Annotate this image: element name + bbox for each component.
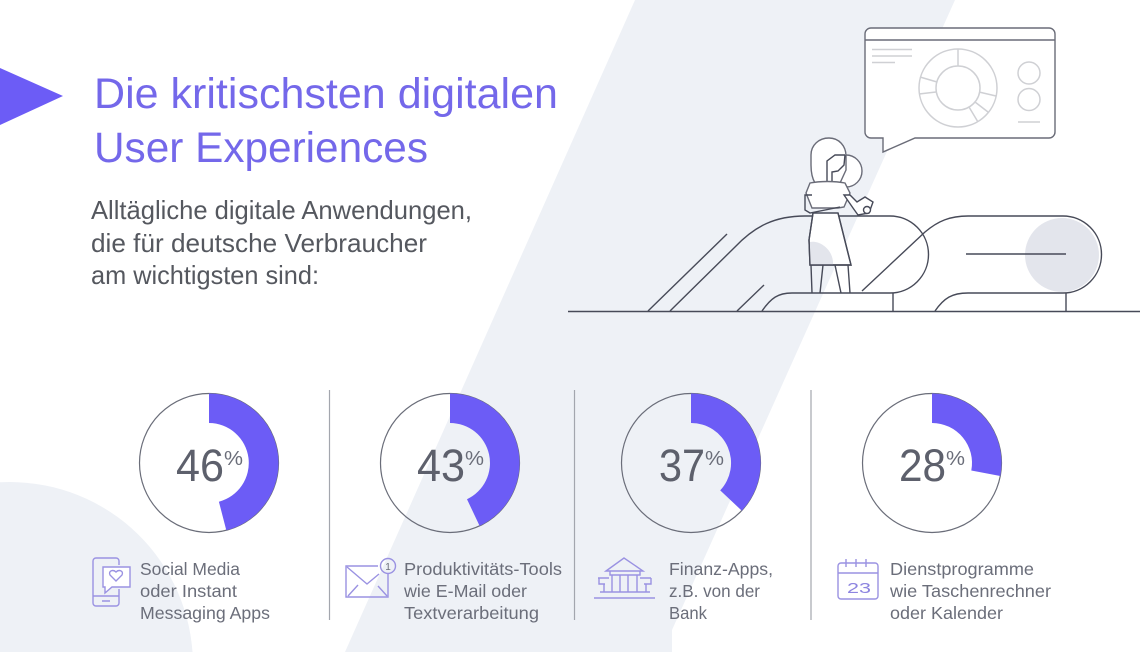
title: Die kritischsten digitalen	[94, 70, 558, 118]
label: social media: oder Instant	[140, 581, 237, 601]
label: finance apps	[669, 559, 773, 623]
label: utilities: wie Taschenrechner	[889, 581, 1051, 601]
icon: envelope with notification	[346, 558, 396, 597]
label: utilities: Dienstprogramme	[890, 559, 1034, 579]
title: User Experiences	[94, 124, 428, 172]
label: productivity tools: Produktivitäts-Tools	[404, 559, 562, 579]
stat 4: donut 28%: %	[946, 448, 965, 470]
label: social media	[140, 559, 270, 623]
dividers	[330, 390, 811, 620]
intro text: die für deutsche Verbraucher	[91, 228, 427, 258]
icon: envelope with notification: 1	[385, 562, 391, 573]
right escalator	[862, 216, 1102, 311]
stat 2: donut 43%: 43	[417, 440, 465, 491]
label: finance apps: Finanz-Apps,	[669, 559, 773, 579]
label: utilities: oder Kalender	[890, 603, 1003, 623]
label: productivity tools: wie E-Mail oder	[403, 581, 527, 601]
stat 2: donut 43%	[380, 394, 520, 532]
arrow marker	[0, 68, 63, 125]
icon: phone with heart message	[93, 558, 130, 606]
stat 1: donut 46%: 46	[176, 440, 224, 491]
intro text: Alltägliche digitale Anwendungen,	[91, 195, 472, 225]
icon: bank building	[594, 558, 655, 598]
left escalator	[648, 216, 928, 311]
label: social media: Social Media	[140, 559, 240, 579]
stat 3: donut 37%	[622, 393, 761, 532]
intro text: am wichtigsten sind:	[91, 260, 319, 290]
intro text	[91, 195, 472, 290]
stat 1: donut 46%: %	[224, 448, 243, 470]
stat 4: donut 28%	[862, 394, 1002, 532]
woman figure	[805, 138, 873, 293]
dashboard speech bubble	[865, 28, 1055, 152]
icon: calendar	[838, 559, 878, 599]
stat 2: donut 43%: %	[465, 448, 484, 470]
label: finance apps: z.B. von der	[669, 581, 760, 601]
label: finance apps: Bank	[669, 603, 707, 623]
icon: calendar: 23	[847, 580, 871, 597]
label: utilities	[889, 559, 1051, 623]
ground line	[568, 310, 1140, 312]
stat 1: donut 46%	[140, 394, 278, 532]
title	[94, 70, 558, 172]
stat 3: donut 37%: %	[705, 448, 724, 470]
label: social media: Messaging Apps	[140, 603, 270, 623]
stat 3: donut 37%: 37	[659, 440, 705, 491]
illustration: woman on escalators with dashboard bubble	[568, 28, 1140, 312]
label: productivity tools	[403, 559, 562, 623]
stat 4: donut 28%: 28	[899, 440, 946, 491]
label: productivity tools: Textverarbeitung	[404, 603, 539, 623]
